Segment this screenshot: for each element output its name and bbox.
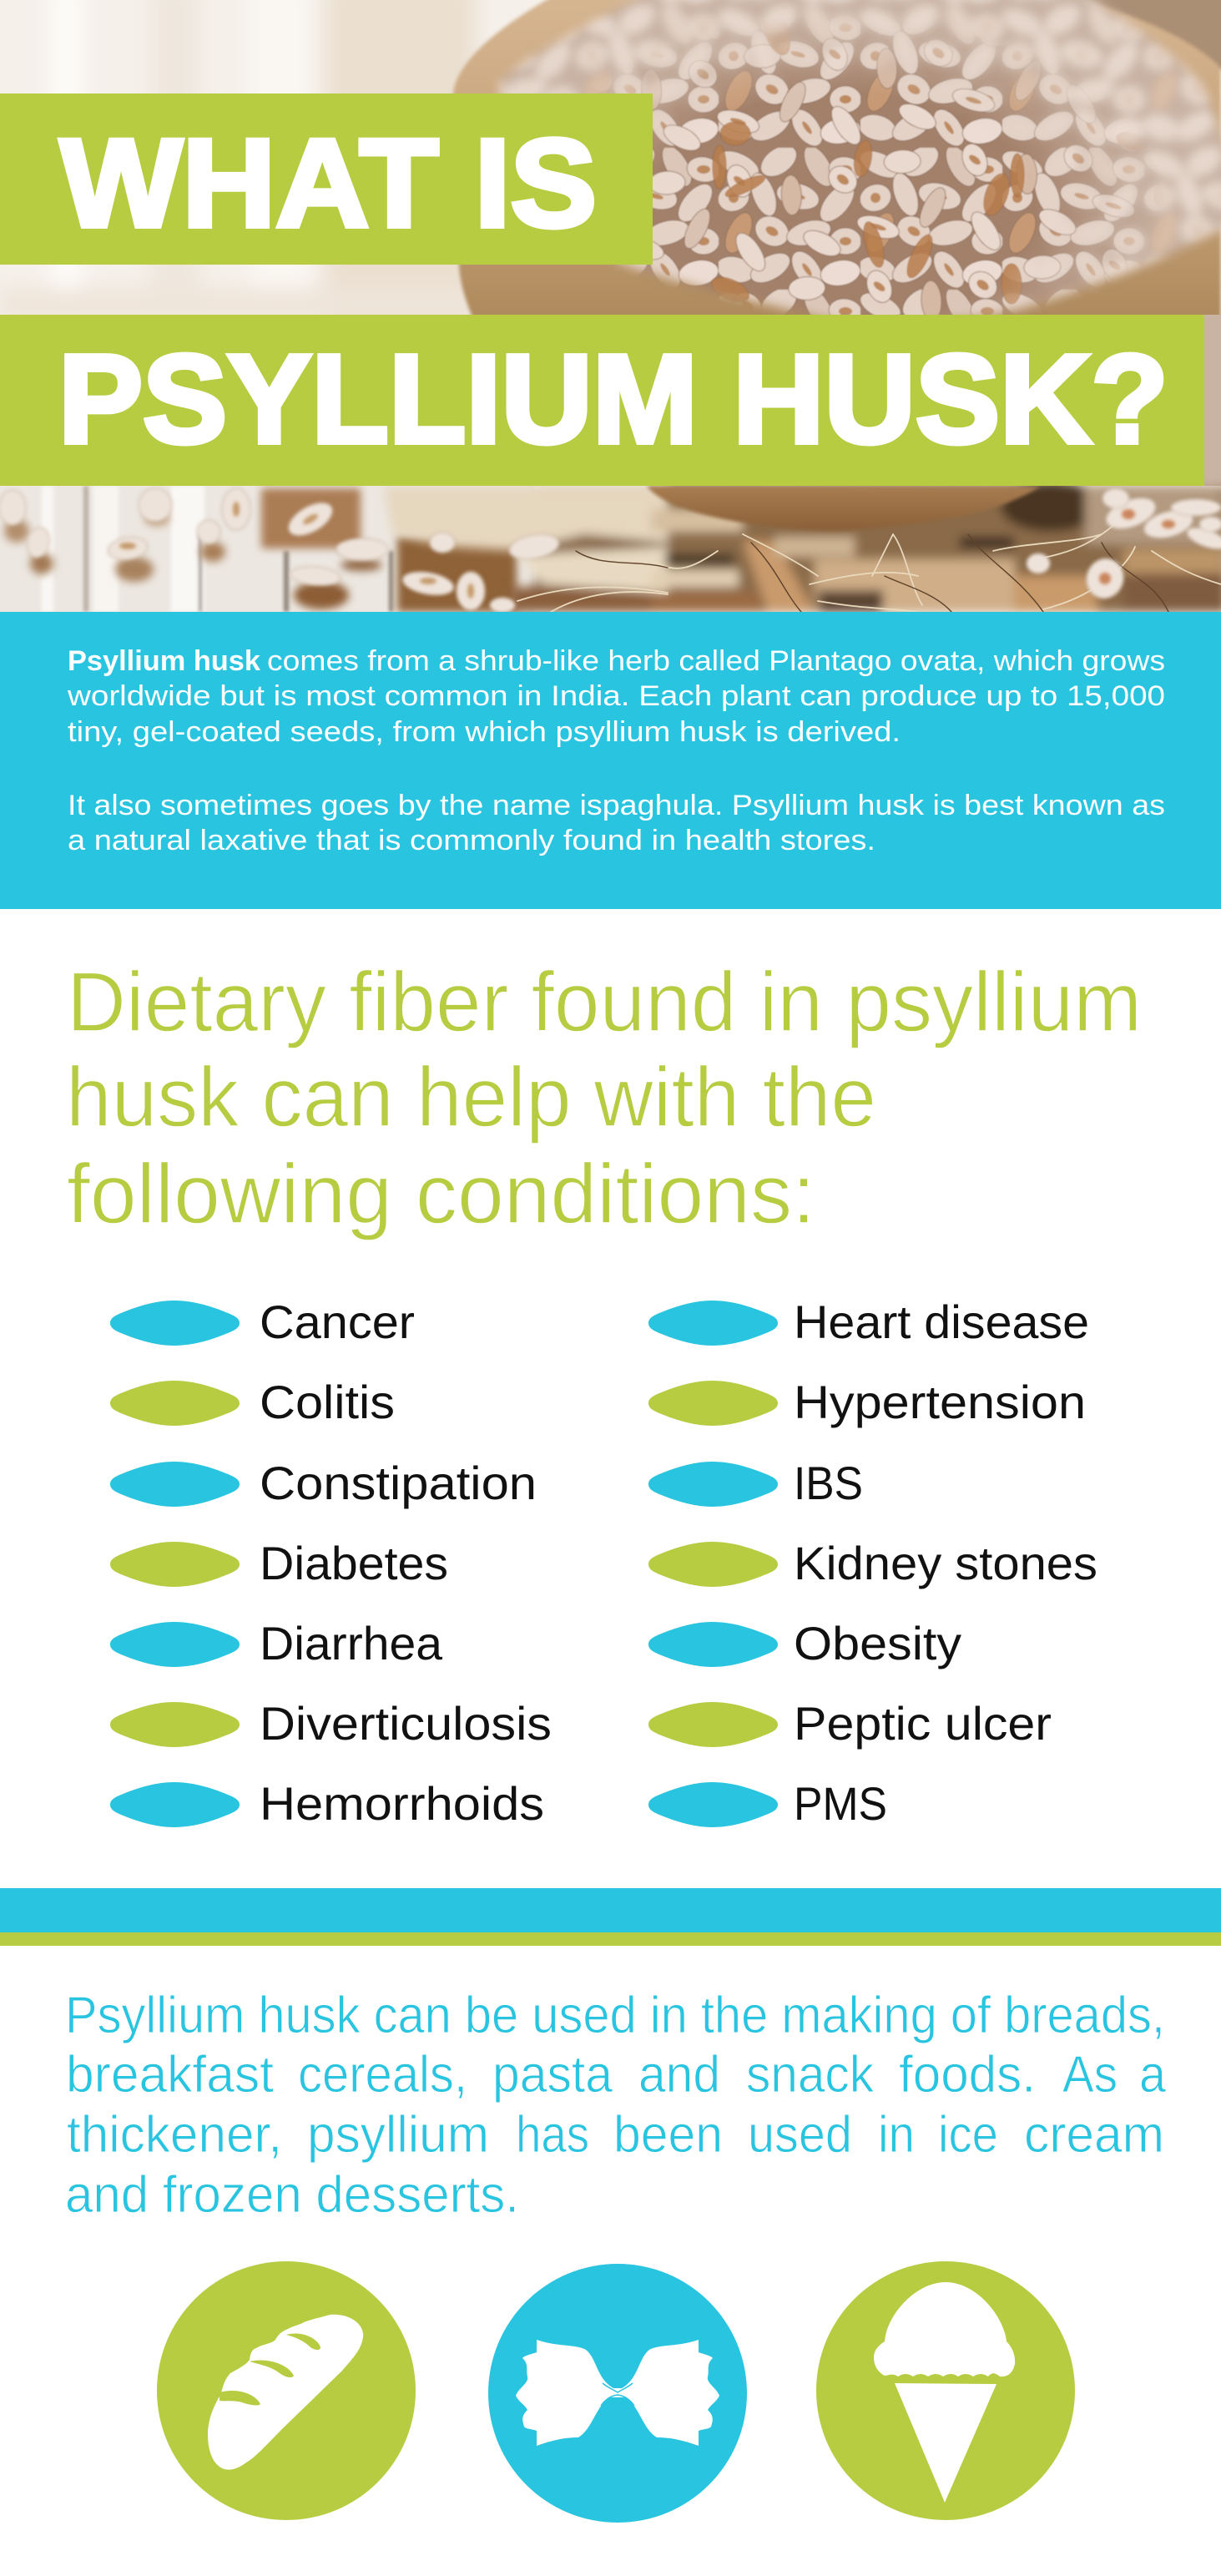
title band: WHAT IS xyxy=(0,93,653,265)
panel: introduction: worldwide but is most common in India. Each plant can produce up to 15,000 xyxy=(67,680,1165,712)
text block: food uses: used xyxy=(748,2106,852,2164)
list: conditions right column: Peptic ulcer xyxy=(794,1697,1052,1750)
text block: food uses: ice xyxy=(938,2106,998,2164)
panel: introduction: tiny, gel-coated seeds, from which psyllium husk is derived. xyxy=(68,716,901,748)
list: conditions left column: Diarrhea xyxy=(260,1617,443,1669)
icon: bread xyxy=(157,2261,416,2520)
text block: food uses: snack xyxy=(746,2046,875,2104)
icon: farfalle pasta xyxy=(488,2264,747,2523)
title band: PSYLLIUM HUSK?: PSYLLIUM HUSK? xyxy=(58,328,1168,469)
text block: food uses: foods. xyxy=(899,2046,1036,2104)
panel: introduction xyxy=(0,612,1221,909)
heading: dietary fiber conditions xyxy=(66,956,1142,1241)
panel: introduction: a natural laxative that is commonly found in health stores. xyxy=(68,825,875,856)
heading: dietary fiber conditions: Dietary fiber found in psyllium xyxy=(67,956,1142,1049)
panel: introduction: comes from a shrub-like herb called Plantago ovata, which grows xyxy=(267,645,1165,677)
list: conditions left column: Colitis xyxy=(260,1376,395,1428)
lower wooden tabletop xyxy=(0,486,534,612)
text block: food uses: cream xyxy=(1024,2106,1164,2164)
text block: food uses: As xyxy=(1062,2046,1118,2104)
hero photo: psyllium seeds in a wooden bowl xyxy=(0,0,1221,613)
list: conditions right column: IBS xyxy=(794,1457,863,1509)
list: conditions right column: PMS xyxy=(794,1777,887,1830)
bowl rim xyxy=(453,0,1221,321)
list: conditions left column: Diverticulosis xyxy=(260,1697,552,1750)
list: conditions right column: Obesity xyxy=(794,1617,961,1669)
list: conditions right column: Kidney stones xyxy=(794,1537,1097,1589)
list: conditions left column: Diabetes xyxy=(260,1537,448,1589)
list: conditions right column xyxy=(648,1296,1097,1830)
heading: dietary fiber conditions: husk can help with the xyxy=(66,1051,876,1144)
text block: food uses: pasta xyxy=(492,2046,613,2104)
seed mound xyxy=(494,0,1221,315)
text block: food uses: cereals, xyxy=(298,2046,467,2104)
list: conditions right column: Heart disease xyxy=(794,1296,1089,1348)
text block: food uses: Psyllium husk can be used in the making of breads, xyxy=(65,1987,1165,2044)
text block: food uses: has xyxy=(516,2106,589,2164)
text block: food uses: thickener, xyxy=(67,2106,282,2164)
text block: food uses xyxy=(65,1987,1166,2224)
heading: dietary fiber conditions: following conditions: xyxy=(67,1148,815,1241)
divider bands xyxy=(0,1888,1221,1946)
text block: food uses: breakfast xyxy=(66,2046,274,2104)
list: conditions left column: Hemorrhoids xyxy=(260,1777,544,1830)
scattered seeds xyxy=(0,488,1221,613)
text block: food uses: been xyxy=(613,2106,723,2164)
panel: introduction: Psyllium husk xyxy=(68,645,260,677)
text block: food uses: in xyxy=(878,2106,915,2164)
list: conditions left column: Constipation xyxy=(260,1457,537,1509)
text block: food uses: psyllium xyxy=(307,2106,489,2164)
text block: food uses: a xyxy=(1139,2046,1166,2104)
icon: ice cream cone xyxy=(816,2261,1075,2520)
list: conditions left column: Cancer xyxy=(260,1296,415,1348)
text block: food uses: and frozen desserts. xyxy=(65,2166,519,2224)
burlap cloth and bowl base xyxy=(384,482,1221,612)
list: conditions right column: Hypertension xyxy=(794,1376,1086,1428)
title band: WHAT IS: WHAT IS xyxy=(60,113,597,253)
panel: introduction: It also sometimes goes by the name ispaghula. Psyllium husk is best known as xyxy=(68,790,1165,821)
list: conditions left column xyxy=(110,1296,552,1830)
text block: food uses: and xyxy=(638,2046,720,2104)
